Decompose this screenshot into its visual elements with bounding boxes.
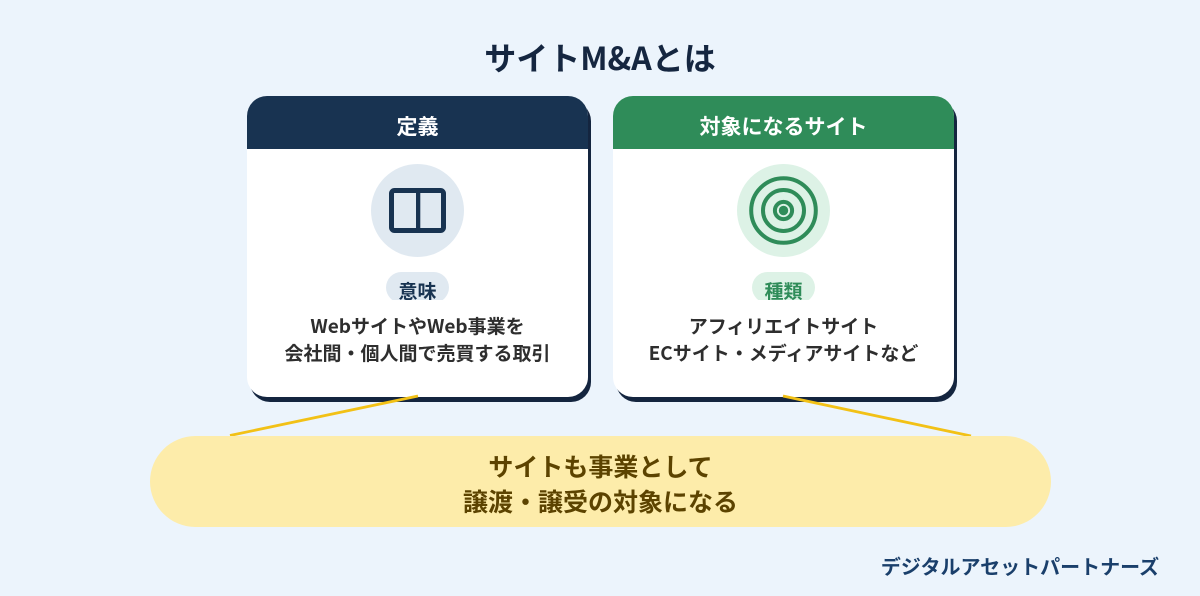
text: site types — [649, 312, 918, 366]
panel heading: definition — [247, 96, 588, 149]
callout — [150, 436, 1051, 527]
text: definition — [284, 312, 550, 366]
callout text: 譲渡・譲受の対象になる — [463, 483, 738, 519]
icon: book — [371, 164, 464, 257]
icon: target — [737, 164, 830, 257]
text: definition: 会社間・個人間で売買する取引 — [284, 339, 550, 366]
panel: target sites — [613, 96, 954, 397]
title: サイトM&Aとは — [484, 34, 716, 80]
callout text — [463, 448, 738, 519]
footer brand: デジタルアセットパートナーズ — [881, 551, 1159, 580]
text: site types: アフィリエイトサイト — [689, 312, 878, 339]
text: definition: WebサイトやWeb事業を — [310, 312, 525, 339]
panel heading: definition: 定義 — [396, 111, 438, 141]
panel heading: target sites: 対象になるサイト — [700, 111, 868, 141]
text: site types: ECサイト・メディアサイトなど — [649, 339, 918, 366]
panel heading: target sites — [613, 96, 954, 149]
panel: definition — [247, 96, 588, 397]
callout text: サイトも事業として — [488, 448, 713, 484]
